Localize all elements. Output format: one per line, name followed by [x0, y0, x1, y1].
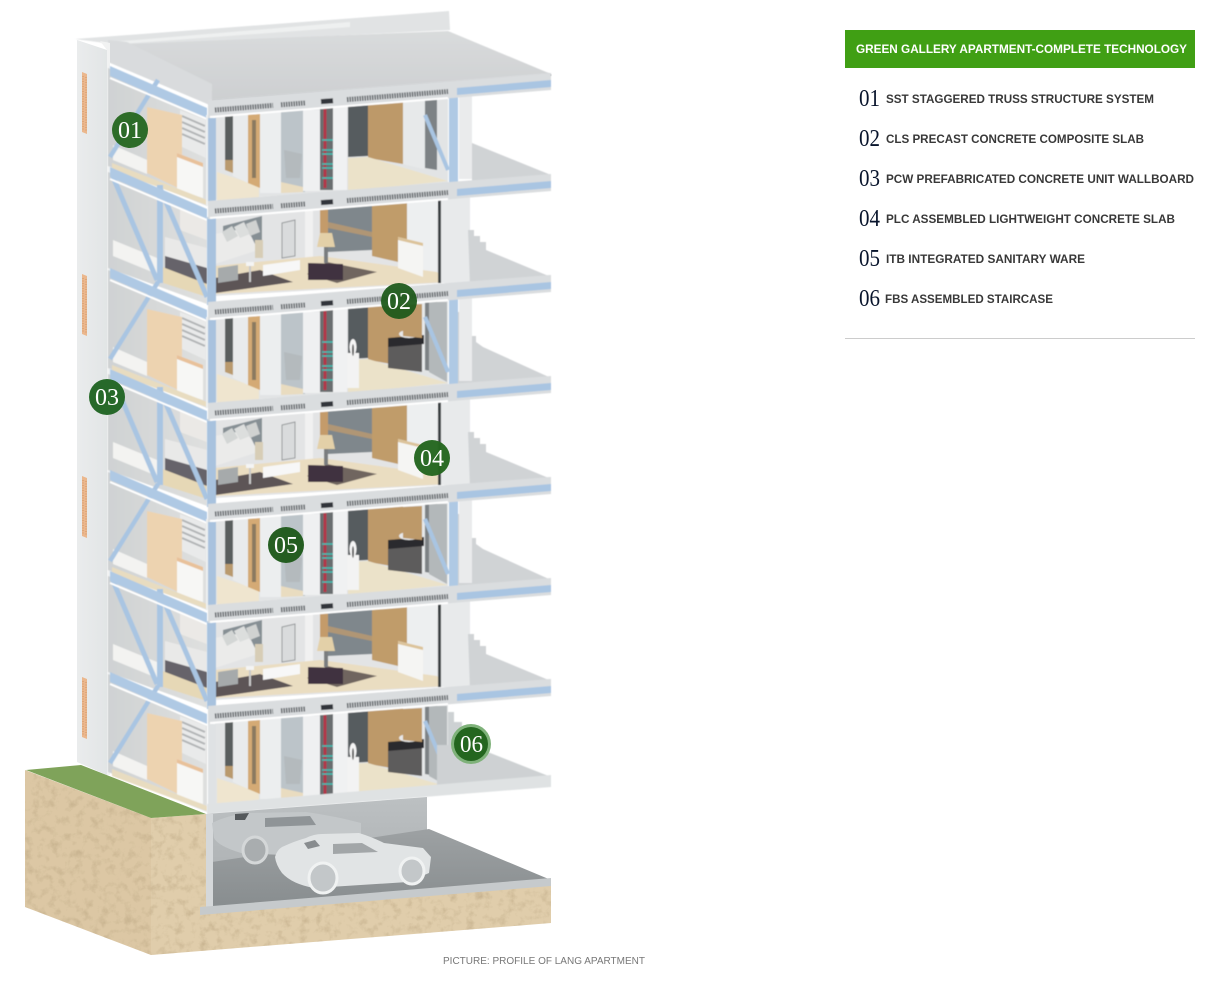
apartment floors — [207, 73, 551, 814]
item 05 — [859, 246, 1085, 272]
item 03: PCW PREFABRICATED CONCRETE UNIT WALLBOARD — [886, 172, 1194, 186]
caption: PICTURE: PROFILE OF LANG APARTMENT — [443, 956, 645, 967]
left facade wall — [77, 40, 110, 775]
item 05: ITB INTEGRATED SANITARY WARE — [886, 252, 1085, 266]
item 02: 02 — [859, 126, 880, 152]
item 05: 05 — [859, 246, 880, 272]
marker 01 — [112, 112, 148, 148]
marker 01: 01 — [118, 118, 142, 144]
item 04: PLC ASSEMBLED LIGHTWEIGHT CONCRETE SLAB — [886, 212, 1175, 226]
item 01: SST STAGGERED TRUSS STRUCTURE SYSTEM — [886, 92, 1154, 106]
marker 06 — [451, 724, 491, 764]
item 04 — [859, 206, 1175, 232]
soil left face — [25, 770, 151, 955]
vents — [82, 72, 87, 739]
marker 02: 02 — [387, 289, 411, 315]
item 03 — [859, 166, 1194, 192]
building cross-section — [75, 11, 551, 814]
item 02: CLS PRECAST CONCRETE COMPOSITE SLAB — [886, 132, 1144, 146]
item 06 — [859, 286, 1053, 312]
item 04: 04 — [859, 206, 880, 232]
front car — [275, 833, 431, 893]
marker 03 — [89, 379, 125, 415]
marker 04: 04 — [420, 446, 444, 472]
ground block — [25, 765, 551, 955]
basement garage — [200, 797, 551, 915]
item 06: FBS ASSEMBLED STAIRCASE — [885, 292, 1053, 306]
marker 05 — [268, 527, 304, 563]
grass — [26, 765, 206, 818]
heading: GREEN GALLERY APARTMENT-COMPLETE TECHNOLOGY — [856, 42, 1187, 56]
item 02 — [859, 126, 1144, 152]
soil front face — [151, 814, 551, 955]
item 03: 03 — [859, 166, 880, 192]
rear car — [212, 812, 361, 863]
roof — [75, 11, 551, 106]
panel: technology legend — [845, 30, 1195, 338]
heading — [845, 30, 1195, 68]
marker 05: 05 — [274, 533, 298, 559]
item 06: 06 — [859, 286, 880, 312]
item 01 — [859, 86, 1154, 112]
marker 06: 06 — [460, 732, 483, 758]
item 01: 01 — [859, 86, 880, 112]
marker 04 — [414, 440, 450, 476]
marker 03: 03 — [95, 385, 119, 411]
left wing of the building — [108, 66, 207, 812]
marker 02 — [381, 283, 417, 319]
